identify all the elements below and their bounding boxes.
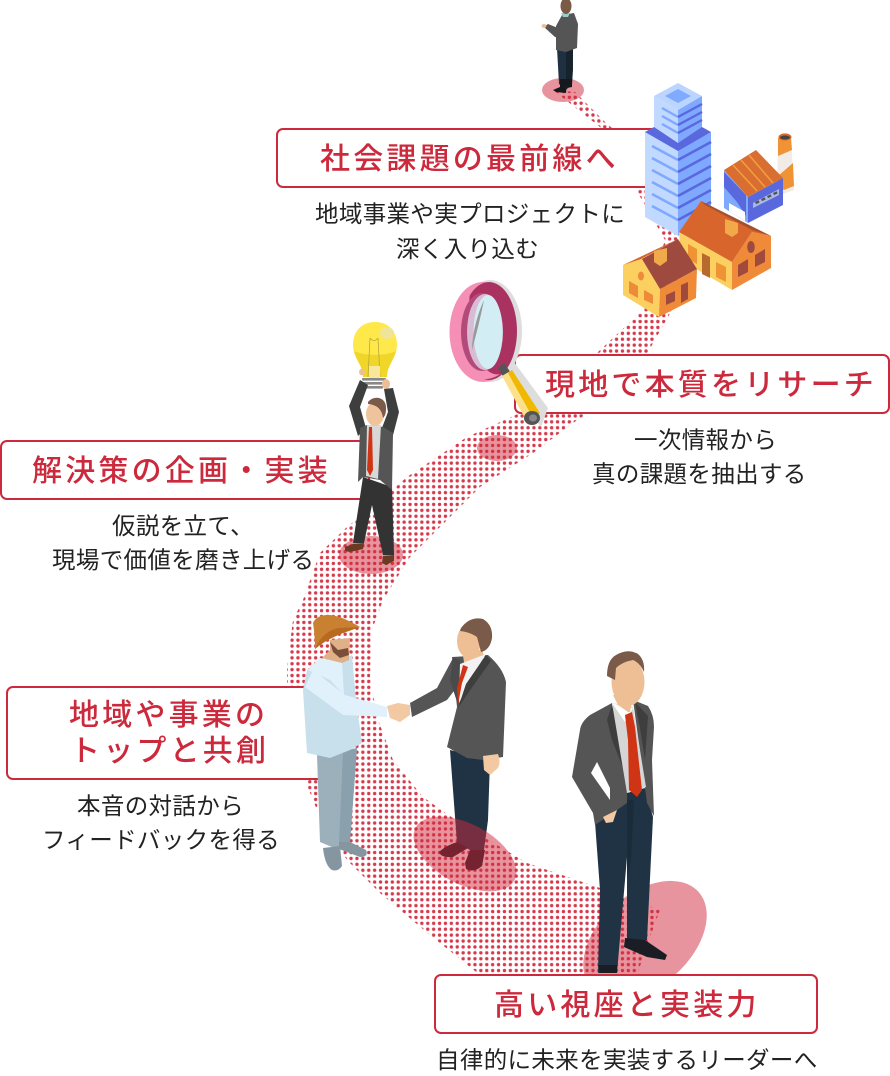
illustration: magnifying glass <box>450 280 548 427</box>
ground ellipses <box>339 78 729 1022</box>
label: 解決策の企画・実装: 解決策の企画・実装 <box>32 455 331 488</box>
ground ellipse under businessman <box>401 801 529 907</box>
text: 社会課題 description <box>315 201 625 262</box>
text: リサーチ description: 真の課題を抽出する <box>592 461 807 487</box>
text: 対話 description <box>42 793 280 853</box>
text: 企画 description: 仮説を立て、 <box>112 513 254 539</box>
icon: light bulb <box>353 322 397 389</box>
label: 高い視座と実装力 <box>435 975 817 1033</box>
text: リサーチ description <box>592 427 807 487</box>
illustration: factory and chimney <box>724 133 794 223</box>
illustration: office tower <box>645 83 711 236</box>
label: 地域や事業のトップと共創 <box>7 687 327 779</box>
label: 現地で本質をリサーチ: 現地で本質をリサーチ <box>545 369 877 402</box>
illustration: small house <box>623 239 697 317</box>
handshake <box>387 703 410 722</box>
text: 対話 description: フィードバックを得る <box>42 827 280 853</box>
label: 現地で本質をリサーチ <box>515 355 889 413</box>
label: 社会課題の最前線へ: 社会課題の最前線へ <box>320 143 619 176</box>
label: 高い視座と実装力: 高い視座と実装力 <box>494 989 760 1022</box>
text: 企画 description <box>52 513 314 573</box>
figure: local business owner with hat <box>303 615 410 870</box>
figure: man holding up a light bulb <box>345 322 399 565</box>
text: 社会課題 description: 深く入り込む <box>396 236 539 262</box>
label: 地域や事業のトップと共創: トップと共創 <box>70 735 269 768</box>
label: 社会課題の最前線へ <box>277 129 667 187</box>
text: 社会課題 description: 地域事業や実プロジェクトに <box>315 201 625 227</box>
label: 解決策の企画・実装 <box>1 441 369 499</box>
text: 企画 description: 現場で価値を磨き上げる <box>52 547 314 573</box>
figure: businessman shaking hands <box>410 618 506 870</box>
label: 地域や事業のトップと共創: 地域や事業の <box>69 699 268 732</box>
figure: leader in the foreground <box>572 651 667 973</box>
dotted path <box>287 90 690 975</box>
text: リーダー description: 自律的に未来を実装するリーダーへ <box>436 1047 818 1073</box>
figure: man looking out at the top <box>542 0 578 93</box>
text: 対話 description: 本音の対話から <box>77 793 244 819</box>
text: リサーチ description: 一次情報から <box>634 427 777 453</box>
illustration: large house <box>679 201 771 290</box>
